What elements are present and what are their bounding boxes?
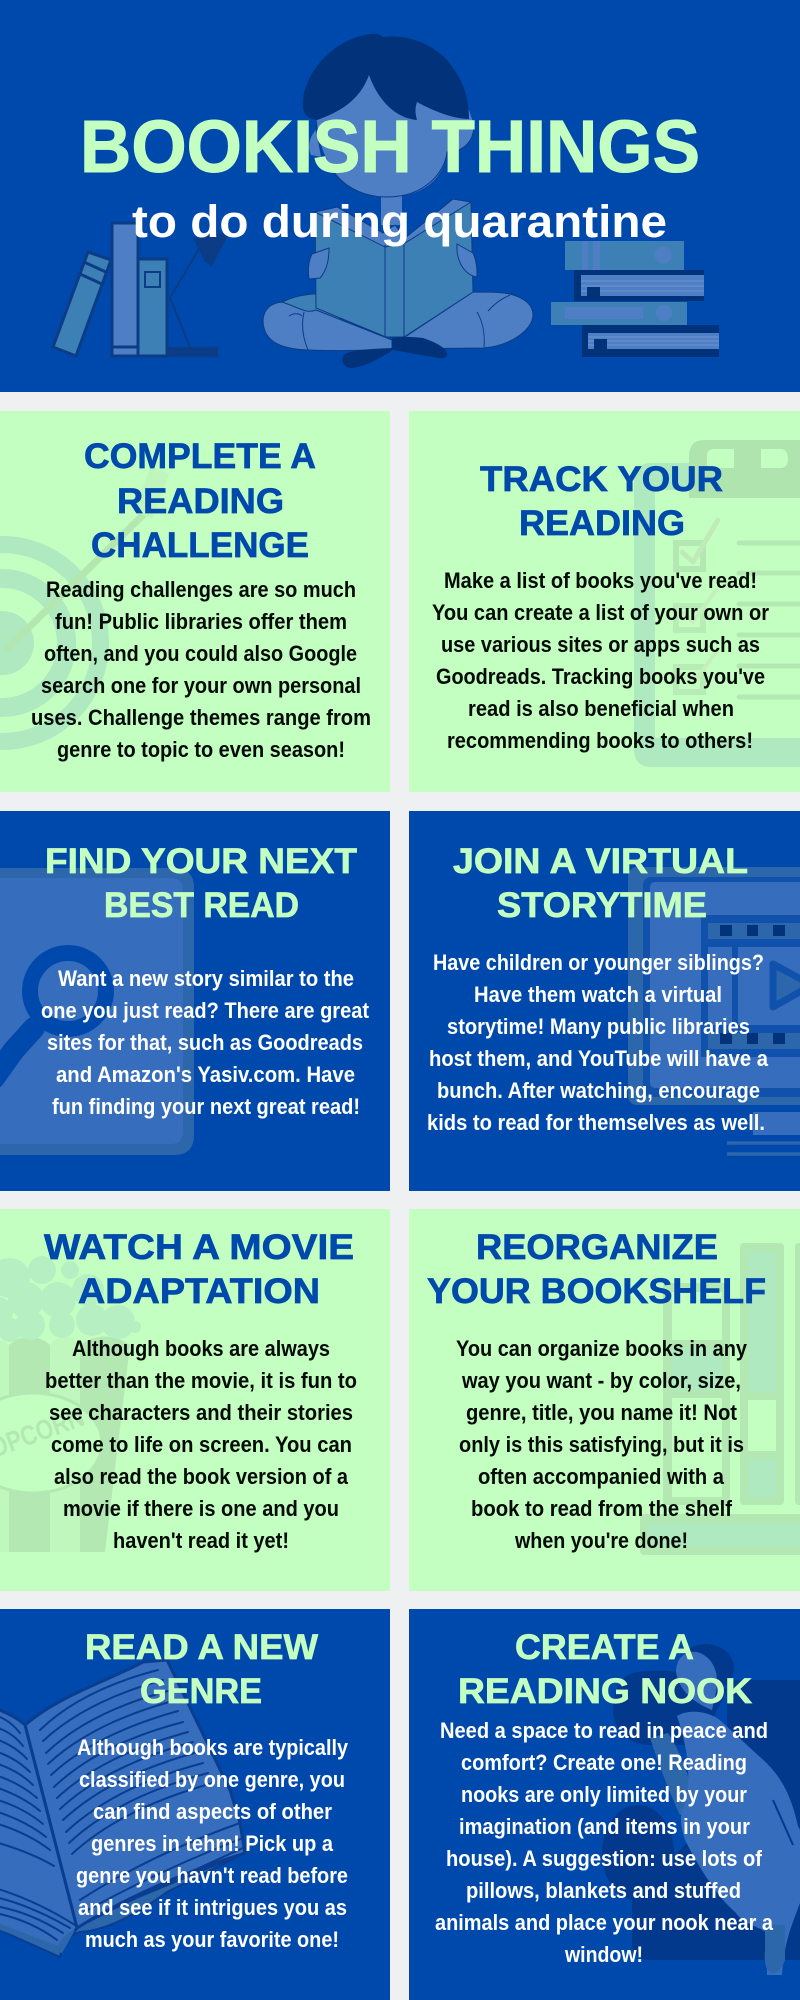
body text — [76, 1735, 349, 1952]
body text: book to read from the shelf — [471, 1496, 733, 1521]
icon: person resting in armchair — [602, 1644, 800, 1975]
body text: genres in tehm! Pick up a — [91, 1831, 334, 1856]
body text: read is also beneficial when — [468, 696, 734, 721]
body text: and see if it intrigues you as — [78, 1895, 347, 1920]
body text: and Amazon's Yasiv.com. Have — [56, 1062, 355, 1087]
body text: can find aspects of other — [93, 1799, 332, 1824]
body text: kids to read for themselves as well. — [427, 1110, 765, 1135]
panel: join a virtual storytime — [409, 811, 800, 1191]
body text: storytime! Many public libraries — [447, 1014, 750, 1039]
heading: COMPLETE A — [84, 436, 316, 476]
heading — [84, 436, 316, 565]
panel: find your next best read — [0, 811, 390, 1191]
body text: better than the movie, it is fun to — [45, 1368, 357, 1393]
panel: track your reading — [409, 411, 800, 792]
icon: magnifier tablet — [0, 868, 194, 1155]
body text: see characters and their stories — [49, 1400, 353, 1425]
heading: REORGANIZE — [476, 1227, 718, 1267]
heading — [427, 1227, 766, 1311]
body text: Need a space to read in peace and — [440, 1718, 768, 1743]
body text: haven't read it yet! — [113, 1528, 289, 1553]
icon: popcorn box — [0, 1256, 141, 1552]
body text: comfort? Create one! Reading — [461, 1750, 747, 1775]
heading — [453, 841, 748, 925]
body text: way you want - by color, size, — [461, 1368, 741, 1393]
panel: complete a reading challenge — [0, 411, 390, 792]
heading — [85, 1627, 319, 1711]
body text: animals and place your nook near a — [435, 1910, 774, 1935]
body text — [41, 966, 370, 1119]
heading: STORYTIME — [497, 885, 707, 925]
heading — [458, 1627, 752, 1711]
body text: one you just read? There are great — [41, 998, 370, 1023]
body text: Make a list of books you've read! — [444, 568, 757, 593]
title: BOOKISH THINGS — [80, 105, 700, 188]
icon: reading child — [263, 34, 533, 368]
body text — [45, 1336, 357, 1553]
heading: READING — [519, 503, 685, 543]
body text: recommending books to others! — [447, 728, 753, 753]
panel: reorganize your bookshelf — [409, 1209, 800, 1591]
body text: only is this satisfying, but it is — [459, 1432, 744, 1457]
body text — [31, 577, 371, 762]
body text: genre you havn't read before — [76, 1863, 348, 1888]
body text: movie if there is one and you — [63, 1496, 339, 1521]
body text — [427, 950, 769, 1135]
heading: GENRE — [140, 1671, 262, 1711]
body text: search one for your own personal — [41, 673, 361, 698]
body text: fun! Public libraries offer them — [55, 609, 347, 634]
heading: JOIN A VIRTUAL — [453, 841, 748, 881]
heading: BEST READ — [104, 885, 299, 925]
body text: when you're done! — [514, 1528, 688, 1553]
heading: CREATE A — [515, 1627, 694, 1667]
body text: You can create a list of your own or — [432, 600, 769, 625]
panel: watch a movie adaptation — [0, 1209, 390, 1591]
body text: also read the book version of a — [54, 1464, 349, 1489]
heading: CHALLENGE — [91, 525, 309, 565]
body text — [435, 1718, 774, 1967]
icon: video player — [628, 867, 800, 1154]
body text: You can organize books in any — [456, 1336, 748, 1361]
body text: house). A suggestion: use lots of — [446, 1846, 763, 1871]
body text: classified by one genre, you — [79, 1767, 345, 1792]
heading: READING — [117, 481, 284, 521]
body text: use various sites or apps such as — [441, 632, 760, 657]
body text: uses. Challenge themes range from — [31, 705, 371, 730]
body text: fun finding your next great read! — [52, 1094, 360, 1119]
body text: Although books are typically — [77, 1735, 349, 1760]
icon: checklist clipboard — [634, 440, 800, 767]
icon: bookshelf — [640, 1243, 800, 1555]
body text — [456, 1336, 748, 1553]
heading: READ A NEW — [85, 1627, 319, 1667]
icon: right book stack — [551, 241, 719, 357]
heading: ADAPTATION — [78, 1271, 320, 1311]
body text: pillows, blankets and stuffed — [466, 1878, 741, 1903]
panel: read a new genre — [0, 1609, 390, 2000]
body text: Want a new story similar to the — [58, 966, 354, 991]
body text: often accompanied with a — [478, 1464, 725, 1489]
icon: open book — [0, 1660, 245, 1957]
body text: host them, and YouTube will have a — [429, 1046, 769, 1071]
heading — [45, 841, 357, 925]
body text: genre to topic to even season! — [57, 737, 345, 762]
body text: Goodreads. Tracking books you've — [436, 664, 765, 689]
body text: imagination (and items in your — [459, 1814, 750, 1839]
body text — [432, 568, 769, 753]
heading: READING NOOK — [458, 1671, 752, 1711]
body text: Although books are always — [72, 1336, 330, 1361]
heading: YOUR BOOKSHELF — [427, 1271, 766, 1311]
body text: Reading challenges are so much — [46, 577, 356, 602]
body text: often, and you could also Google — [44, 641, 357, 666]
body text: much as your favorite one! — [85, 1927, 339, 1952]
panel: create a reading nook — [409, 1609, 800, 2000]
body text: genre, title, you name it! Not — [466, 1400, 738, 1425]
icon: left books and lamp — [53, 223, 230, 357]
heading: WATCH A MOVIE — [44, 1227, 354, 1267]
heading: TRACK YOUR — [480, 459, 723, 499]
icon: target and dart — [0, 470, 160, 750]
body text: nooks are only limited by your — [461, 1782, 747, 1807]
body text: Have them watch a virtual — [474, 982, 722, 1007]
body text: window! — [564, 1942, 643, 1967]
heading — [44, 1227, 354, 1311]
heading — [480, 459, 723, 543]
body text: Have children or younger siblings? — [433, 950, 764, 975]
body text: bunch. After watching, encourage — [437, 1078, 760, 1103]
header banner — [0, 0, 800, 392]
heading: FIND YOUR NEXT — [45, 841, 357, 881]
body text: come to life on screen. You can — [51, 1432, 352, 1457]
body text: sites for that, such as Goodreads — [47, 1030, 363, 1055]
subtitle: to do during quarantine — [132, 196, 667, 247]
